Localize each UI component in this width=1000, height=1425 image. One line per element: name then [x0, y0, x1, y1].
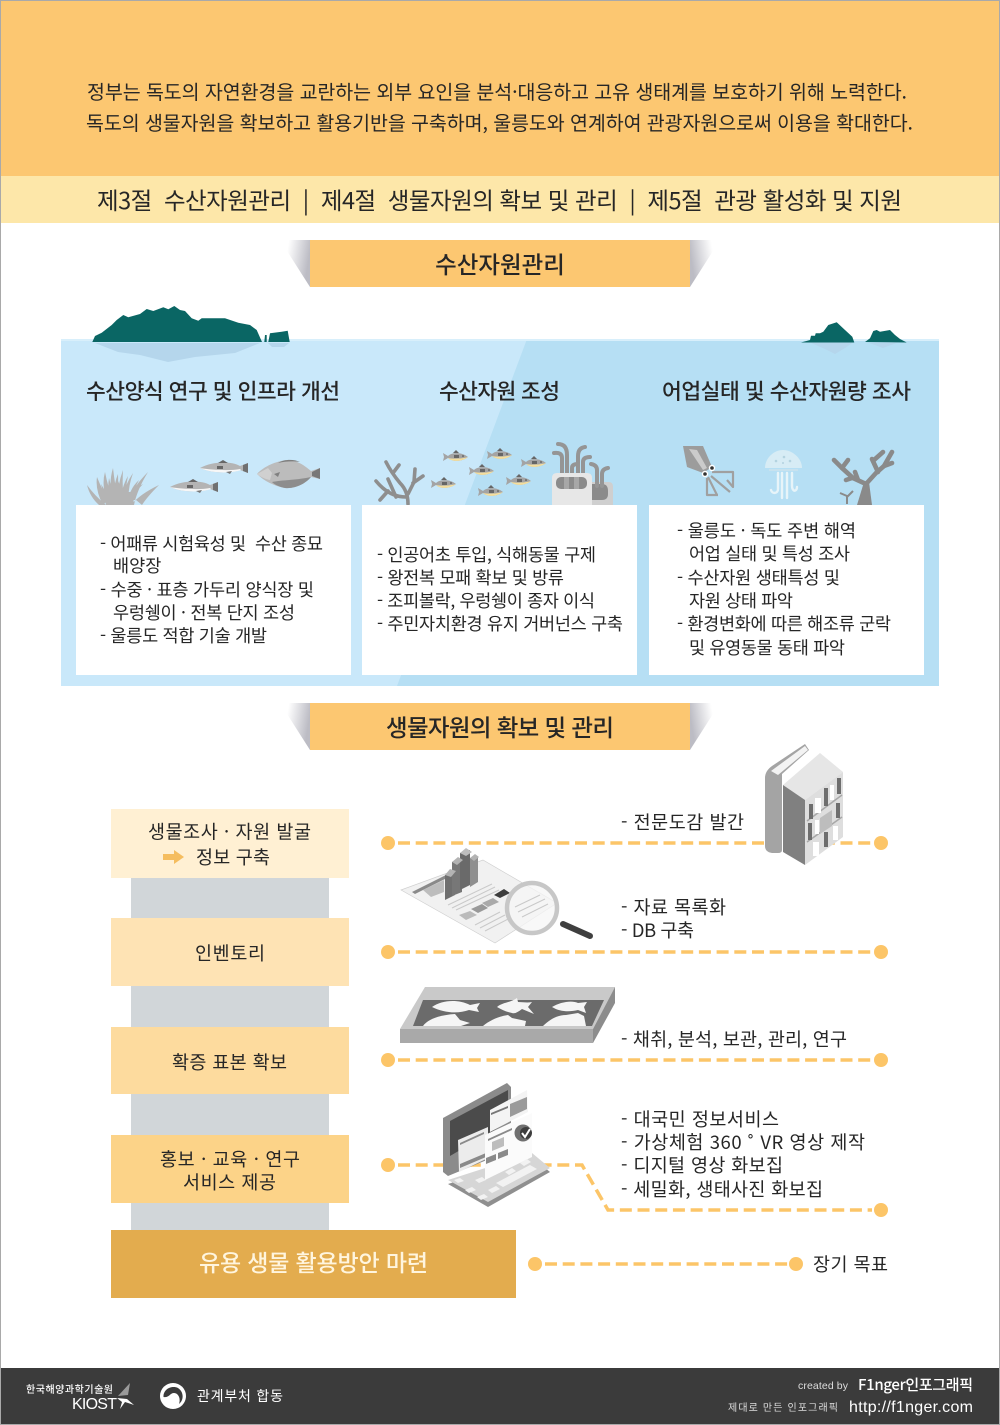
icon: laptop	[443, 1083, 550, 1207]
icon: report and magnifier	[401, 848, 590, 943]
step: inventory: 인벤토리	[195, 940, 265, 966]
KIOST logo: KIOST	[72, 1396, 117, 1413]
card: survey: 및 유영동물 동태 파악	[689, 635, 845, 660]
icon: right islands	[801, 322, 907, 342]
card: survey: - 수산자원 생태특성 및	[677, 565, 840, 590]
icon: anemone	[552, 444, 613, 505]
icon: salmon 2	[170, 479, 218, 493]
connector dots	[381, 836, 888, 1271]
step: services: 홍보 · 교육 · 연구	[160, 1146, 300, 1172]
KIOST logo	[26, 1381, 134, 1413]
icon: flounder	[257, 460, 320, 488]
step: inventory	[111, 918, 349, 986]
credits: created by	[798, 1380, 849, 1392]
label: catalog: - 자료 목록화	[621, 894, 726, 920]
heading: aquaculture: 수산양식 연구 및 인프라 개선	[86, 375, 340, 406]
icon: seaweed	[87, 468, 159, 505]
step: survey	[111, 809, 349, 878]
step: specimens: 확증 표본 확보	[172, 1049, 287, 1075]
credits: http://f1nger.com	[849, 1399, 973, 1416]
panel: sea	[61, 306, 939, 686]
card: survey: 자원 상태 파악	[689, 588, 793, 613]
heading: 생물자원의 확보 및 관리: 생물자원의 확보 및 관리	[386, 709, 614, 743]
heading: 수산자원관리	[280, 240, 720, 287]
card: stock creation	[362, 505, 637, 675]
icon: coral left	[376, 462, 423, 504]
label: catalog	[621, 894, 726, 943]
icon: books	[765, 744, 843, 865]
icon: specimen tray	[400, 987, 615, 1043]
card: survey	[649, 505, 924, 675]
step: specimens	[111, 1027, 349, 1094]
heading: 수산자원관리: 수산자원관리	[435, 246, 565, 280]
intro text line 1: 정부는 독도의 자연환경을 교란하는 외부 요인을 분석·대응하고 고유 생태계를 보호하기 위해 노력한다.	[87, 76, 907, 105]
heading: survey: 어업실태 및 수산자원량 조사	[662, 375, 911, 406]
heading: 생물자원의 확보 및 관리	[280, 703, 720, 750]
label: services: - 대국민 정보서비스	[621, 1106, 779, 1132]
card: stock creation: - 조피볼락, 우렁쉥이 종자 이식	[377, 588, 595, 613]
island reflections	[95, 342, 898, 362]
card: survey: - 환경변화에 따른 해조류 군락	[677, 611, 891, 636]
card: stock creation: - 인공어초 투입, 식해동물 구제	[377, 542, 596, 567]
label: books: - 전문도감 발간	[621, 809, 744, 835]
label: services	[621, 1106, 865, 1202]
card: aquaculture: 우렁쉥이 · 전복 단지 조성	[113, 600, 295, 625]
chapter band	[1, 176, 999, 223]
government emblem	[160, 1383, 186, 1409]
icon: salmon	[200, 460, 248, 474]
label: collection: - 채취, 분석, 보관, 관리, 연구	[621, 1026, 847, 1052]
step: survey: 생물조사 · 자원 발굴	[148, 818, 311, 844]
step: services: 서비스 제공	[183, 1169, 276, 1195]
intro text line 2: 독도의 생물자원을 확보하고 활용기반을 구축하며, 울릉도와 연계하여 관광자원으로써 이용을 확대한다.	[86, 107, 913, 136]
heading: stock creation: 수산자원 조성	[439, 375, 560, 406]
KIOST logo: 한국해양과학기술원	[26, 1381, 113, 1396]
card: aquaculture: 배양장	[113, 553, 161, 578]
label: services: - 세밀화, 생태사진 화보집	[621, 1176, 823, 1202]
label: long-term goal: 장기 목표	[813, 1251, 888, 1277]
card: stock creation: - 주민자치환경 유지 거버넌스 구축	[377, 611, 623, 636]
card: aquaculture: - 울릉도 적합 기술 개발	[100, 623, 267, 648]
label: catalog: - DB 구축	[621, 917, 694, 943]
card: aquaculture: - 어패류 시험육성 및 수산 종묘	[100, 531, 323, 556]
step: services	[111, 1135, 349, 1203]
card: survey: 어업 실태 및 특성 조사	[689, 541, 850, 566]
credits: F1nger인포그래픽	[858, 1374, 973, 1395]
school of small fish	[431, 448, 546, 496]
label: services: - 디지털 영상 화보집	[621, 1152, 783, 1178]
grey column	[131, 878, 329, 1230]
label: services: - 가상체험 360 ˚ VR 영상 제작	[621, 1129, 865, 1155]
icon: coral right	[834, 452, 892, 505]
step: survey: 정보 구축	[196, 844, 270, 870]
card: stock creation: - 왕전복 모패 확보 및 방류	[377, 565, 564, 590]
icon: left island	[92, 306, 290, 342]
credits: 제대로 만든 인포그래픽	[728, 1399, 838, 1414]
credits	[728, 1374, 973, 1416]
footer	[1, 1368, 999, 1424]
card: aquaculture	[76, 505, 351, 675]
icon: jellyfish	[765, 450, 802, 498]
card: survey: - 울릉도 · 독도 주변 해역	[677, 518, 856, 543]
connectors	[398, 843, 872, 1264]
step: long-term goal	[111, 1230, 516, 1298]
card: aquaculture: - 수중 · 표층 가두리 양식장 및	[100, 577, 314, 602]
joint ministries: 관계부처 합동	[197, 1386, 283, 1406]
intro banner	[1, 1, 999, 176]
icon: squid	[683, 446, 733, 495]
chapter text: 제3절 수산자원관리 | 제4절 생물자원의 확보 및 관리 | 제5절 관광 활성화 및 지원	[97, 182, 902, 216]
step: long-term goal: 유용 생물 활용방안 마련	[199, 1244, 428, 1278]
